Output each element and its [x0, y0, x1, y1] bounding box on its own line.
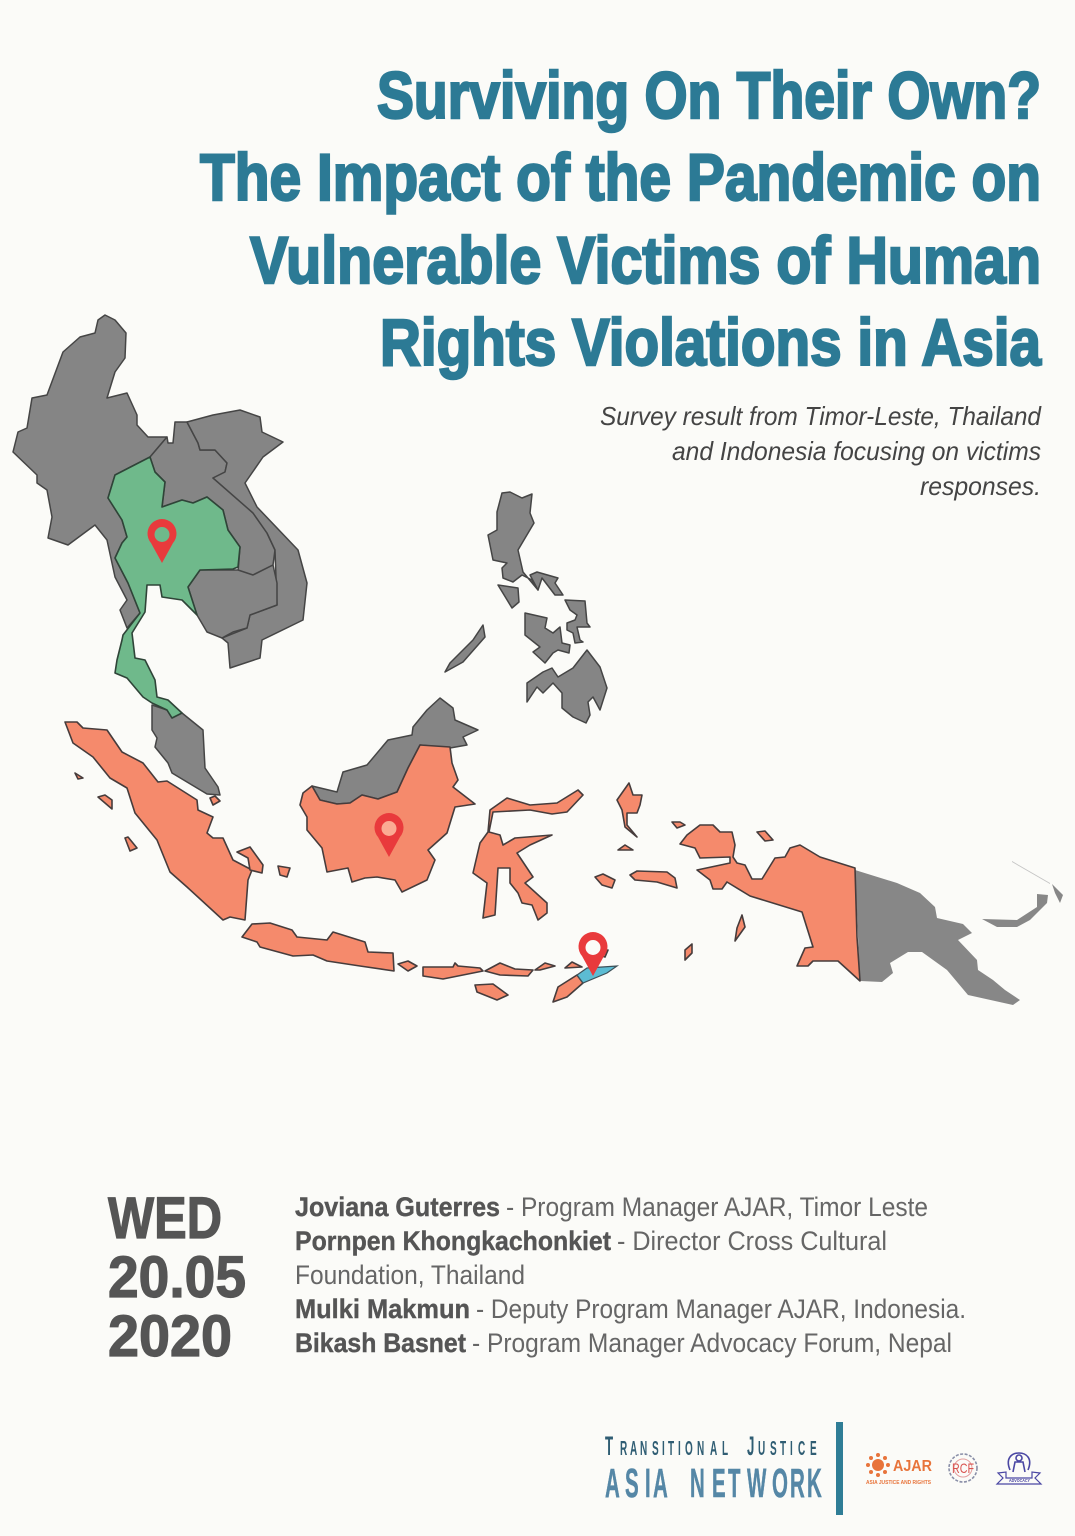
speakers list: Bikash Basnet — [295, 1328, 466, 1358]
subtitle: and Indonesia focusing on victims — [672, 436, 1041, 466]
logo: Transitional Justice Asia Network — [605, 1432, 822, 1506]
logo: Transitional Justice Asia Network: T — [605, 1432, 613, 1461]
logo: Cross Cultural Foundation — [949, 1454, 977, 1482]
logo: AJAR: ASIA JUSTICE AND RIGHTS — [866, 1480, 932, 1486]
subtitle: Survey result from Timor-Leste, Thailand — [600, 401, 1042, 431]
map: neighbouring countries in grey — [13, 315, 607, 804]
speakers list: - Program Manager Advocacy Forum, Nepal — [472, 1328, 952, 1358]
date — [108, 1186, 246, 1369]
speakers list: - Program Manager AJAR, Timor Leste — [506, 1192, 928, 1222]
logo: Transitional Justice Asia Network: ASIA NETWORK — [605, 1460, 822, 1506]
speakers list: - Deputy Program Manager AJAR, Indonesia. — [476, 1294, 966, 1324]
map: Thailand in green — [108, 457, 240, 718]
logo: Advocacy Forum — [997, 1453, 1041, 1484]
speakers list: Foundation, Thailand — [295, 1260, 525, 1290]
speakers list — [295, 1192, 966, 1358]
speakers list: - Director Cross Cultural — [617, 1226, 887, 1256]
date: 2020 — [108, 1304, 232, 1369]
icon: location pin Timor-Leste — [579, 932, 608, 976]
icon: location pin Kalimantan — [375, 813, 404, 857]
speakers list: Pornpen Khongkachonkiet — [295, 1226, 611, 1256]
logo: Transitional Justice Asia Network: J — [747, 1432, 754, 1461]
date: 20.05 — [108, 1245, 246, 1310]
logo: Advocacy Forum: ADVOCACY — [1009, 1478, 1030, 1483]
logo: Transitional Justice Asia Network: RANSITIONAL — [620, 1439, 743, 1460]
title — [200, 58, 1042, 379]
subtitle — [600, 401, 1042, 501]
speakers list: Joviana Guterres — [295, 1192, 500, 1222]
map: Southeast Asia — [13, 315, 1063, 1005]
logo: AJAR — [866, 1453, 932, 1486]
speakers list: Mulki Makmun — [295, 1294, 470, 1324]
subtitle: responses. — [920, 471, 1041, 501]
map: Papua New Guinea — [855, 861, 1063, 1005]
date: WED — [108, 1186, 222, 1251]
map: Timor-Leste in blue — [577, 966, 617, 983]
divider bar — [836, 1422, 843, 1515]
logo: Transitional Justice Asia Network: USTICE — [758, 1439, 817, 1460]
icon: location pin Thailand — [148, 519, 176, 563]
map: Indonesia in orange — [65, 722, 860, 1002]
logo: Cross Cultural Foundation: RCF — [952, 1460, 974, 1476]
logo: AJAR: AJAR — [893, 1458, 932, 1475]
